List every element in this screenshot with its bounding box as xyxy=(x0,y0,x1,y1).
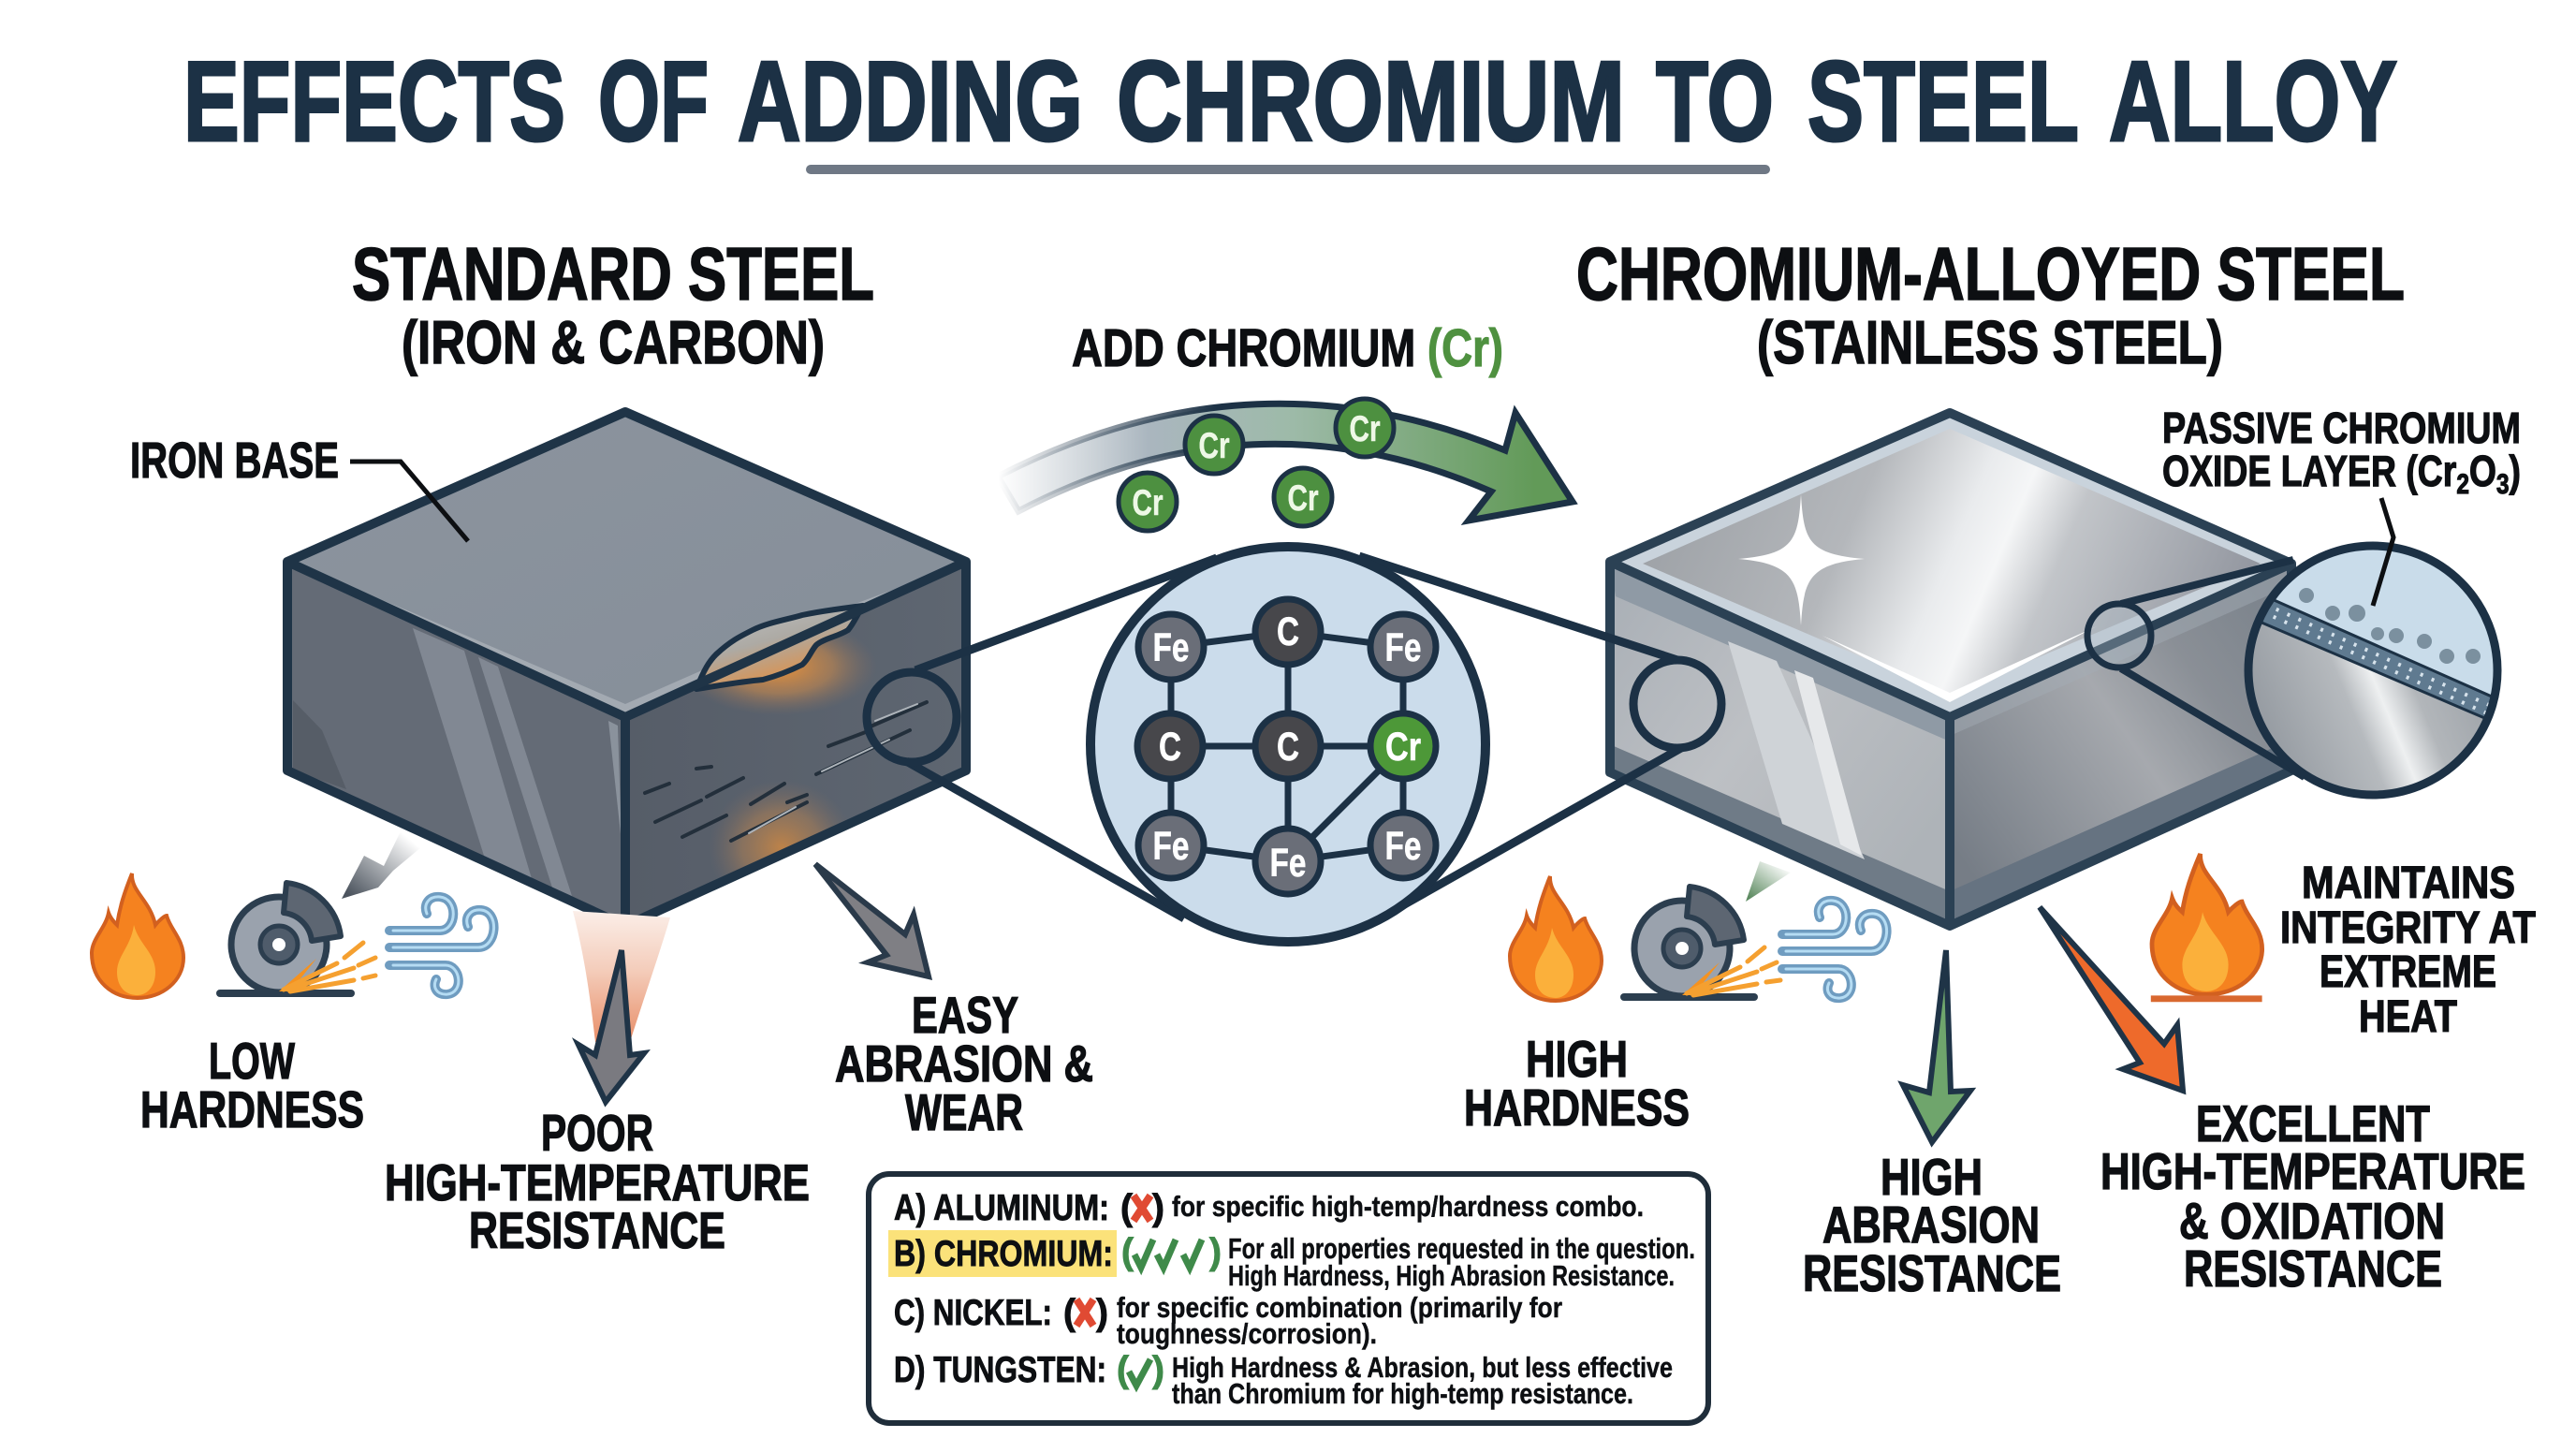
option A xyxy=(894,1188,1644,1228)
lattice magnifier: Fe xyxy=(1385,824,1421,869)
arrow: poor heat resistance xyxy=(578,950,644,1102)
title: STEEL xyxy=(1808,37,2079,165)
alloy left face xyxy=(1610,562,1950,926)
lattice bonds xyxy=(1170,632,1403,861)
chipped corner xyxy=(696,606,863,689)
label: passive chromium oxide layer: ) xyxy=(2510,447,2521,495)
label: excellent oxidation resistance xyxy=(2100,1094,2525,1298)
label: low hardness: LOW xyxy=(209,1032,295,1090)
magnifier lines: left block to lattice xyxy=(867,558,1217,918)
option B: ) xyxy=(1209,1232,1222,1272)
block outline xyxy=(287,412,966,926)
label: easy abrasion and wear: WEAR xyxy=(905,1083,1023,1141)
block right face xyxy=(625,562,966,926)
title: EFFECTS xyxy=(183,37,565,165)
chromium atoms: Cr xyxy=(1133,483,1163,523)
label: easy abrasion and wear xyxy=(835,986,1093,1141)
label: poor high-temperature resistance: RESISTANCE xyxy=(469,1201,725,1259)
icon: grinding disc right xyxy=(1624,887,1780,997)
chromium atoms: Cr xyxy=(1198,426,1230,466)
icon: wind right xyxy=(1782,901,1887,998)
small lens on oxide edge xyxy=(2087,604,2151,668)
label: low hardness: HARDNESS xyxy=(140,1080,364,1138)
block top bevel xyxy=(298,565,959,717)
label: easy abrasion and wear: EASY xyxy=(912,986,1018,1044)
small lens on alloy block xyxy=(1633,660,1721,748)
label: excellent oxidation resistance: & OXIDATION xyxy=(2179,1192,2445,1250)
label: iron base xyxy=(130,433,468,541)
lattice magnifier: C xyxy=(1277,609,1299,654)
chromium atoms: Cr xyxy=(1288,478,1318,519)
lattice magnifier: Fe xyxy=(1153,625,1189,670)
icon: flame right xyxy=(1510,876,1602,1001)
heading: add chromium: ADD CHROMIUM (Cr) xyxy=(1072,318,1503,378)
option D: ( xyxy=(1117,1350,1129,1390)
block top face xyxy=(287,412,966,717)
option C: toughness/corrosion). xyxy=(1117,1317,1377,1350)
option B: For all properties requested in the question. xyxy=(1228,1232,1695,1265)
block left face xyxy=(287,562,625,926)
option A: ( xyxy=(1120,1188,1133,1228)
heading: chromium-alloyed steel: (STAINLESS STEEL) xyxy=(1757,308,2223,376)
title: ALLOY xyxy=(2109,37,2397,165)
option B: High Hardness, High Abrasion Resistance. xyxy=(1228,1259,1675,1292)
option C: ( xyxy=(1063,1293,1076,1333)
label: passive chromium oxide layer: O xyxy=(2469,447,2496,495)
icon: large flame xyxy=(2151,854,2262,999)
label: passive chromium oxide layer: 3 xyxy=(2496,469,2510,500)
icon: flame left xyxy=(92,873,183,998)
label: high hardness xyxy=(1464,1030,1690,1137)
label: passive chromium oxide layer: 2 xyxy=(2456,469,2469,500)
label: high hardness: HARDNESS xyxy=(1464,1078,1690,1137)
label: iron base: IRON BASE xyxy=(130,433,339,489)
title: CHROMIUM xyxy=(1117,37,1625,165)
lattice magnifier xyxy=(1090,547,1486,942)
label: high abrasion resistance: HIGH xyxy=(1881,1148,1983,1206)
sparkle xyxy=(1738,494,1865,625)
option C: for specific combination (primarily for xyxy=(1117,1291,1562,1324)
surface scratches xyxy=(645,702,927,841)
chromium atoms: Cr xyxy=(1350,409,1380,449)
label: maintains integrity: MAINTAINS xyxy=(2302,858,2515,908)
label: maintains integrity: EXTREME xyxy=(2320,947,2496,997)
arrow: high abrasion resistance xyxy=(1903,950,1970,1142)
panel: chromium alloyed block xyxy=(1610,413,2291,926)
title: TO xyxy=(1656,37,1774,165)
lattice magnifier: Cr xyxy=(1385,725,1421,770)
option A: for specific high-temp/hardness combo. xyxy=(1172,1190,1644,1223)
small lens on standard block xyxy=(867,672,957,762)
lattice magnifier: C xyxy=(1277,725,1299,770)
panel: answer options xyxy=(869,1174,1708,1423)
label: passive chromium oxide layer: OXIDE LAYER (Cr xyxy=(2162,447,2525,495)
arrow: low hardness xyxy=(342,831,421,899)
chromium atoms xyxy=(1119,399,1394,531)
option C: ) xyxy=(1096,1293,1108,1333)
arrow: easy abrasion xyxy=(815,864,929,976)
magnifier lines: alloy block to lattice xyxy=(1359,556,1721,918)
panel: standard steel block xyxy=(287,412,966,926)
option B: ( xyxy=(1121,1232,1134,1272)
label: high abrasion resistance xyxy=(1803,1148,2061,1302)
arrow: add chromium xyxy=(998,404,1573,521)
alloy top face xyxy=(1610,413,2291,717)
title: OF xyxy=(598,37,709,165)
option A: A) ALUMINUM: xyxy=(894,1188,1109,1228)
lattice magnifier: Fe xyxy=(1385,625,1421,670)
title: ADDING xyxy=(738,37,1083,165)
title underline xyxy=(811,165,1765,174)
oxide layer magnifier xyxy=(2087,543,2509,805)
label: low hardness xyxy=(140,1032,364,1138)
option D: than Chromium for high-temp resistance. xyxy=(1172,1377,1633,1410)
label: excellent oxidation resistance: EXCELLENT xyxy=(2196,1094,2430,1152)
lattice magnifier: C xyxy=(1159,725,1181,770)
label: poor high-temperature resistance: POOR xyxy=(541,1104,653,1162)
icon: grinding disc left xyxy=(220,883,375,993)
atoms xyxy=(1137,599,1436,894)
label: passive chromium oxide layer xyxy=(2162,404,2521,606)
option B: B) CHROMIUM: xyxy=(894,1234,1113,1274)
option B xyxy=(894,1232,1695,1292)
lattice magnifier: Fe xyxy=(1153,824,1189,869)
rust patches xyxy=(706,637,868,874)
alloy outline xyxy=(1610,413,2291,926)
heading: standard steel: STANDARD STEEL xyxy=(352,232,874,315)
white edge highlight xyxy=(1822,626,2097,702)
label: easy abrasion and wear: ABRASION & xyxy=(835,1034,1093,1093)
label: excellent oxidation resistance: RESISTANCE xyxy=(2184,1240,2442,1298)
option D xyxy=(894,1350,1673,1410)
arrow: excellent heat resistance xyxy=(2040,907,2183,1091)
label: high abrasion resistance: ABRASION xyxy=(1822,1196,2040,1254)
heat glow under standard block xyxy=(573,911,670,1042)
option D: High Hardness & Abrasion, but less effective xyxy=(1172,1351,1673,1384)
label: poor high-temperature resistance: HIGH-TEMPERATURE xyxy=(385,1153,810,1211)
lattice magnifier: Fe xyxy=(1269,841,1307,886)
label: maintains integrity: HEAT xyxy=(2359,992,2457,1042)
label: poor high-temperature resistance xyxy=(385,1104,810,1259)
oxide lens body xyxy=(2252,550,2494,790)
label: maintains integrity xyxy=(2280,858,2536,1042)
heading: chromium-alloyed steel xyxy=(1576,232,2405,376)
heading: standard steel: (IRON & CARBON) xyxy=(402,308,825,376)
icon: wind left xyxy=(389,897,494,994)
label: high abrasion resistance: RESISTANCE xyxy=(1803,1244,2061,1302)
arrow: high hardness xyxy=(1746,861,1791,902)
option C xyxy=(894,1291,1562,1350)
highlight: chromium xyxy=(888,1230,1117,1277)
label: high hardness: HIGH xyxy=(1526,1030,1628,1088)
title xyxy=(183,37,2397,165)
option D: ) xyxy=(1152,1350,1164,1390)
heading: standard steel xyxy=(352,232,874,376)
alloy right face xyxy=(1950,564,2291,926)
option A: ) xyxy=(1152,1188,1164,1228)
option C: C) NICKEL: xyxy=(894,1293,1052,1333)
option D: D) TUNGSTEN: xyxy=(894,1350,1106,1390)
